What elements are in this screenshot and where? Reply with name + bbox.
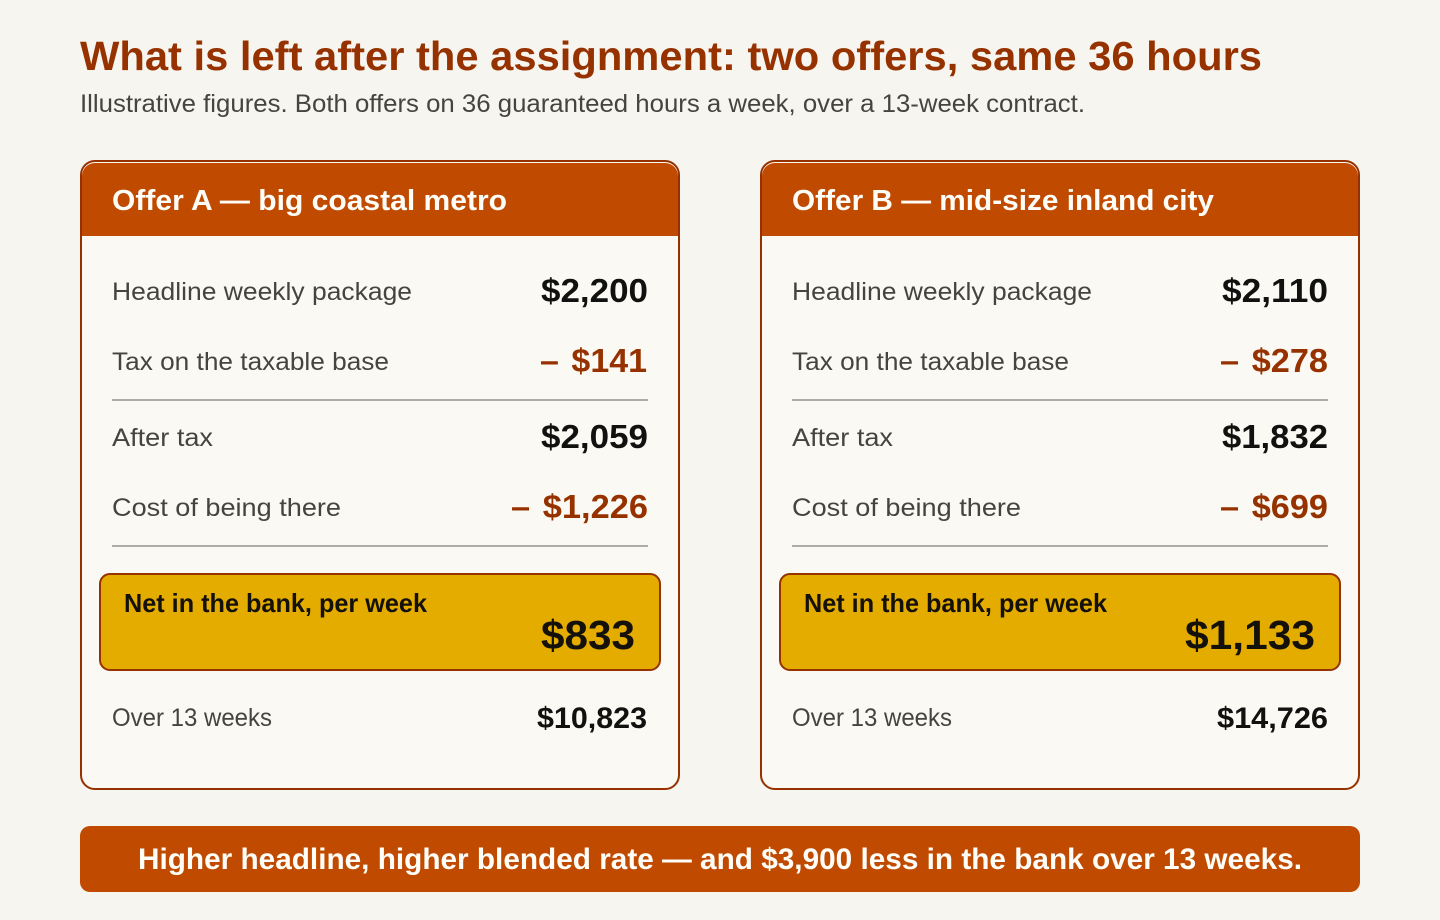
Offer A headline row: Headline weekly package <box>112 278 412 306</box>
Offer B cost row <box>792 488 1328 525</box>
Offer A headline row: $2,200 <box>541 272 648 309</box>
Offer B header band <box>762 163 1358 236</box>
Offer A cost row: Cost of being there <box>112 494 341 522</box>
Offer B after tax row: After tax <box>792 424 894 452</box>
title: What is left after the assignment: two offers, same 36 hours <box>80 33 1262 79</box>
Offer A tax row: – $141 <box>540 342 647 379</box>
Offer A tax row: Tax on the taxable base <box>112 348 389 376</box>
Offer B net callout <box>780 574 1340 670</box>
Offer B headline row <box>792 272 1328 309</box>
Offer A header band <box>82 163 678 236</box>
Offer B tax row: Tax on the taxable base <box>792 348 1069 376</box>
Offer A 13-week total <box>112 702 647 735</box>
Offer A headline row <box>112 272 648 309</box>
takeaway banner: Higher headline, higher blended rate — and $3,900 less in the bank over 13 weeks. <box>138 843 1302 876</box>
Offer B tax row: – $278 <box>1220 342 1328 379</box>
Offer B net callout: Net in the bank, per week <box>804 588 1108 618</box>
Offer A heading: Offer A — big coastal metro <box>112 185 507 217</box>
Offer B headline row: $2,110 <box>1222 272 1328 309</box>
Offer A net callout: $833 <box>541 612 635 658</box>
Offer B net callout: $1,133 <box>1185 612 1315 658</box>
Offer B after tax row: $1,832 <box>1222 418 1328 455</box>
Offer B tax row <box>792 342 1328 379</box>
Offer B cost row: Cost of being there <box>792 494 1021 522</box>
Offer A after tax row: $2,059 <box>541 418 648 455</box>
Offer A 13-week total: Over 13 weeks <box>112 704 272 732</box>
takeaway banner <box>80 826 1360 892</box>
Offer B heading: Offer B — mid-size inland city <box>792 185 1214 217</box>
Offer A net callout <box>100 574 660 670</box>
subtitle: Illustrative figures. Both offers on 36 guaranteed hours a week, over a 13-week contract. <box>80 90 1085 118</box>
Offer A after tax row: After tax <box>112 424 214 452</box>
Offer A net callout: Net in the bank, per week <box>124 588 428 618</box>
Offer A after tax row <box>112 418 648 455</box>
Offer A 13-week total: $10,823 <box>537 702 647 735</box>
panel: Offer A <box>81 161 679 789</box>
Offer B cost row: – $699 <box>1220 488 1328 525</box>
panel: Offer B <box>761 161 1359 789</box>
Offer B 13-week total <box>792 702 1328 735</box>
Offer A cost row <box>112 488 648 525</box>
Offer B 13-week total: Over 13 weeks <box>792 704 952 732</box>
Offer B headline row: Headline weekly package <box>792 278 1092 306</box>
Offer B after tax row <box>792 418 1328 455</box>
Offer B 13-week total: $14,726 <box>1217 702 1328 735</box>
Offer A tax row <box>112 342 647 379</box>
Offer A cost row: – $1,226 <box>511 488 648 525</box>
